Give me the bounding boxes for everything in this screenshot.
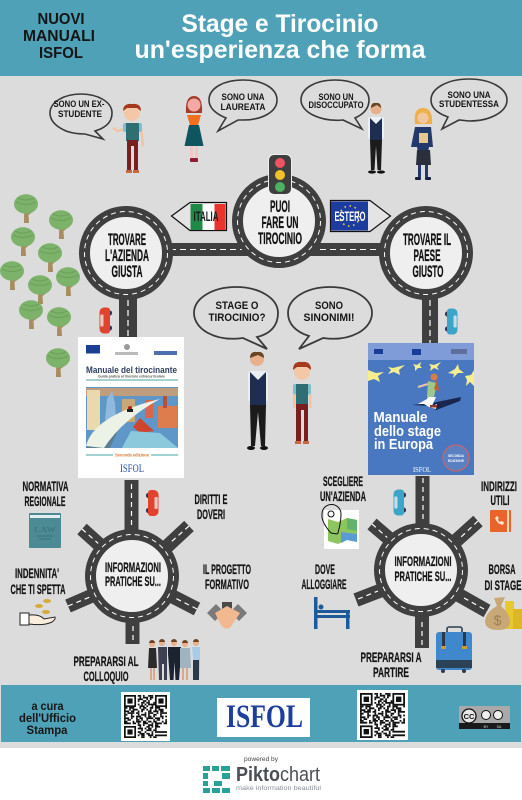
- sign: Estero: ESTERO: [334, 208, 366, 224]
- person: boy, centre: [293, 362, 312, 444]
- sign: Estero: [330, 200, 390, 232]
- series label: [23, 11, 95, 62]
- road: left vertical: [119, 295, 137, 338]
- speech bubble: sono sinonimi: [288, 287, 372, 349]
- book cover: Manuale dello stage in Europa: [368, 343, 474, 475]
- label: prepararsi a partire: PARTIRE: [373, 664, 409, 680]
- road: right vertical: [422, 295, 438, 344]
- speech bubble: stage o tirocinio: TIROCINIO?: [208, 312, 266, 324]
- book cover: Manuale dello stage in Europa: ISFOL: [413, 466, 431, 474]
- label: normativa regionale: NORMATIVA: [22, 478, 68, 494]
- speech bubble: ex-studente: SONO UN EX-: [54, 99, 104, 110]
- title: un'esperienza che forma: [134, 36, 427, 64]
- roundabout: trovare l'azienda giusta: TROVARE: [108, 230, 146, 249]
- roundabout: trovare il paese giusto: GIUSTO: [412, 262, 444, 281]
- roundabout: trovare l'azienda giusta: L'AZIENDA: [105, 246, 149, 265]
- book cover: Manuale del tirocinante: Manuale del tirocinante: [86, 365, 177, 376]
- stamp: [443, 445, 469, 471]
- stamp: EDIZIONE: [448, 459, 465, 463]
- speech bubble: stage o tirocinio: STAGE O: [216, 300, 259, 312]
- person: man in navy vest: [368, 103, 385, 174]
- book cover: Manuale dello stage in Europa: in Europa: [374, 436, 434, 453]
- footer band: [1, 685, 521, 742]
- icon: handshake: [207, 602, 247, 629]
- icon: blue car lower: [394, 490, 406, 516]
- speech bubble: laureata: SONO UNA: [222, 92, 265, 103]
- person: girl in orange top: [184, 96, 204, 162]
- label: preparsi al colloquio: [74, 653, 139, 684]
- sign: Italia: [172, 202, 226, 230]
- credit text: a cura: [32, 701, 64, 713]
- label: normativa regionale: REGIONALE: [24, 493, 66, 509]
- roundabout: trovare il paese giusto: PAESE: [414, 246, 440, 265]
- person: boy waving: [113, 104, 143, 173]
- icon: money bag and coins: $: [494, 612, 502, 628]
- speech bubble: ex-studente: STUDENTE: [58, 109, 102, 120]
- powered by piktochart: [0, 748, 522, 800]
- book cover: Manuale del tirocinante: [78, 337, 184, 478]
- speech bubble: studentessa: SONO UNA: [448, 90, 491, 101]
- label: diritti e doveri: DIRITTI E: [194, 491, 228, 507]
- speech bubble: sono sinonimi: SONO: [315, 300, 343, 312]
- label: diritti e doveri: [194, 491, 228, 522]
- CC licence badge: BY: [484, 725, 489, 729]
- piktochart logo mark: [203, 766, 230, 793]
- book cover: Manuale dello stage in Europa: Manuale: [374, 409, 428, 426]
- speech bubble: ex-studente: [50, 94, 112, 139]
- icon: law book: LAW: [34, 526, 57, 534]
- roundabout: trovare l'azienda giusta: GIUSTA: [112, 262, 142, 281]
- person: man in navy vest, centre: [247, 352, 268, 450]
- roundabout: informazioni pratiche left: INFORMAZIONI: [105, 559, 161, 575]
- series label: NUOVI: [38, 11, 84, 28]
- CC licence badge: SA: [497, 725, 502, 729]
- stars: [368, 362, 474, 386]
- title: Stage e Tirocinio: [182, 10, 378, 38]
- label: dove alloggiare: [302, 561, 346, 592]
- stamp: SECONDA: [448, 454, 464, 458]
- speech bubble: studentessa: [431, 79, 507, 129]
- roundabout: informazioni pratiche right: [356, 476, 487, 648]
- QR code right: [357, 690, 408, 740]
- label: normativa regionale: [22, 478, 68, 509]
- trees: [0, 194, 80, 377]
- icon: blue car: [445, 308, 458, 334]
- label: preparsi al colloquio: PREPARARSI AL: [74, 653, 139, 669]
- book cover: Manuale del tirocinante: ISFOL: [120, 461, 144, 475]
- title: [134, 10, 427, 64]
- label: il progetto formativo: [203, 561, 251, 592]
- label: prepararsi a partire: [360, 649, 422, 680]
- label: scegliere un'azienda: SCEGLIERE: [323, 473, 363, 489]
- text: ALLOGGIARE: [302, 576, 346, 592]
- icon: traffic light: [268, 154, 292, 195]
- roundabout: informazioni pratiche left: [68, 480, 197, 644]
- book illustration: [86, 387, 178, 448]
- book cover: Manuale del tirocinante: Seconda edizione: [115, 452, 149, 458]
- book cover: Manuale del tirocinante: Guida pratica al tirocinio extracurriculare: [98, 374, 165, 378]
- roundabout: informazioni pratiche right: INFORMAZIONI: [394, 553, 452, 569]
- label: dove alloggiare: DOVE: [315, 561, 335, 577]
- CC licence badge: CC: [464, 712, 475, 721]
- speech bubble: disoccupato: SONO UN: [318, 92, 354, 103]
- speech bubble: laureata: LAUREATA: [220, 102, 266, 113]
- label: diritti e doveri: DOVERI: [197, 506, 225, 522]
- label: scegliere un'azienda: UN'AZIENDA: [320, 488, 366, 504]
- speech bubble: sono sinonimi: SINONIMI!: [304, 312, 354, 324]
- person: student girl: [411, 108, 433, 180]
- roundabout: trovare l'azienda giusta: [84, 212, 168, 294]
- label: borsa di stage: [484, 561, 522, 593]
- icon: group of people: [148, 639, 200, 680]
- roundabout: trovare il paese giusto: [384, 212, 468, 294]
- icon: money bag and coins: [485, 597, 522, 630]
- roundabout: puoi fare un tirocinio: TIROCINIO: [258, 229, 302, 248]
- icon: hand with coins: [20, 599, 55, 625]
- powered by piktochart: Piktochart: [236, 764, 320, 786]
- icon: bed: [314, 597, 350, 629]
- header band: [0, 0, 522, 76]
- speech bubble: stage o tirocinio: [194, 287, 278, 349]
- speech bubble: disoccupato: DISOCCUPATO: [308, 100, 364, 111]
- label: il progetto formativo: FORMATIVO: [205, 576, 249, 592]
- roundabout: trovare il paese giusto: TROVARE IL: [403, 230, 451, 249]
- label: il progetto formativo: IL PROGETTO: [203, 561, 251, 577]
- powered by piktochart: powered by: [244, 756, 279, 763]
- QR code left: [121, 692, 170, 741]
- label: indennita: INDENNITA': [15, 565, 59, 581]
- credit text: dell'Ufficio: [19, 713, 76, 725]
- label: indirizzi utili: [481, 478, 517, 508]
- icon: map with pin: [322, 504, 359, 549]
- book cover: Manuale dello stage in Europa: dello stage: [374, 423, 441, 440]
- icon: suitcase: [436, 627, 472, 673]
- label: prepararsi a partire: PREPARARSI A: [360, 649, 422, 665]
- speech bubble: studentessa: STUDENTESSA: [439, 99, 499, 110]
- icon: red car: [100, 308, 112, 334]
- powered by piktochart: make information beautiful: [236, 785, 322, 792]
- credit text: [19, 701, 76, 737]
- series label: ISFOL: [39, 45, 83, 62]
- series label: MANUALI: [23, 28, 95, 45]
- icon: law book: [29, 513, 61, 548]
- speech bubble: disoccupato: [301, 80, 369, 129]
- sign: Italia: ITALIA: [194, 208, 218, 224]
- icon: red car lower: [146, 490, 158, 516]
- label: indennita: CHE TI SPETTA: [10, 581, 66, 597]
- roundabout: puoi fare un tirocinio: PUOI: [270, 197, 290, 216]
- walking figure: [412, 374, 461, 410]
- label: scegliere un'azienda: [320, 473, 366, 504]
- spokes: [356, 476, 487, 648]
- CC licence badge: [459, 706, 510, 729]
- road: horizontal connection: [165, 243, 390, 256]
- ISFOL logo: ISFOL: [226, 699, 303, 735]
- roundabout: informazioni pratiche right: PRATICHE SU...: [394, 568, 452, 584]
- icon: address book: [490, 510, 511, 532]
- roundabout: puoi fare un tirocinio: [238, 180, 320, 262]
- roundabout: puoi fare un tirocinio: FARE UN: [262, 213, 298, 232]
- speech bubble: laureata: [209, 80, 277, 131]
- label: preparsi al colloquio: COLLOQUIO: [84, 668, 129, 684]
- roundabout: informazioni pratiche left: PRATICHE SU...: [105, 573, 161, 589]
- label: indennita: [10, 565, 66, 597]
- spokes: [68, 480, 197, 644]
- credit text: Stampa: [26, 725, 68, 737]
